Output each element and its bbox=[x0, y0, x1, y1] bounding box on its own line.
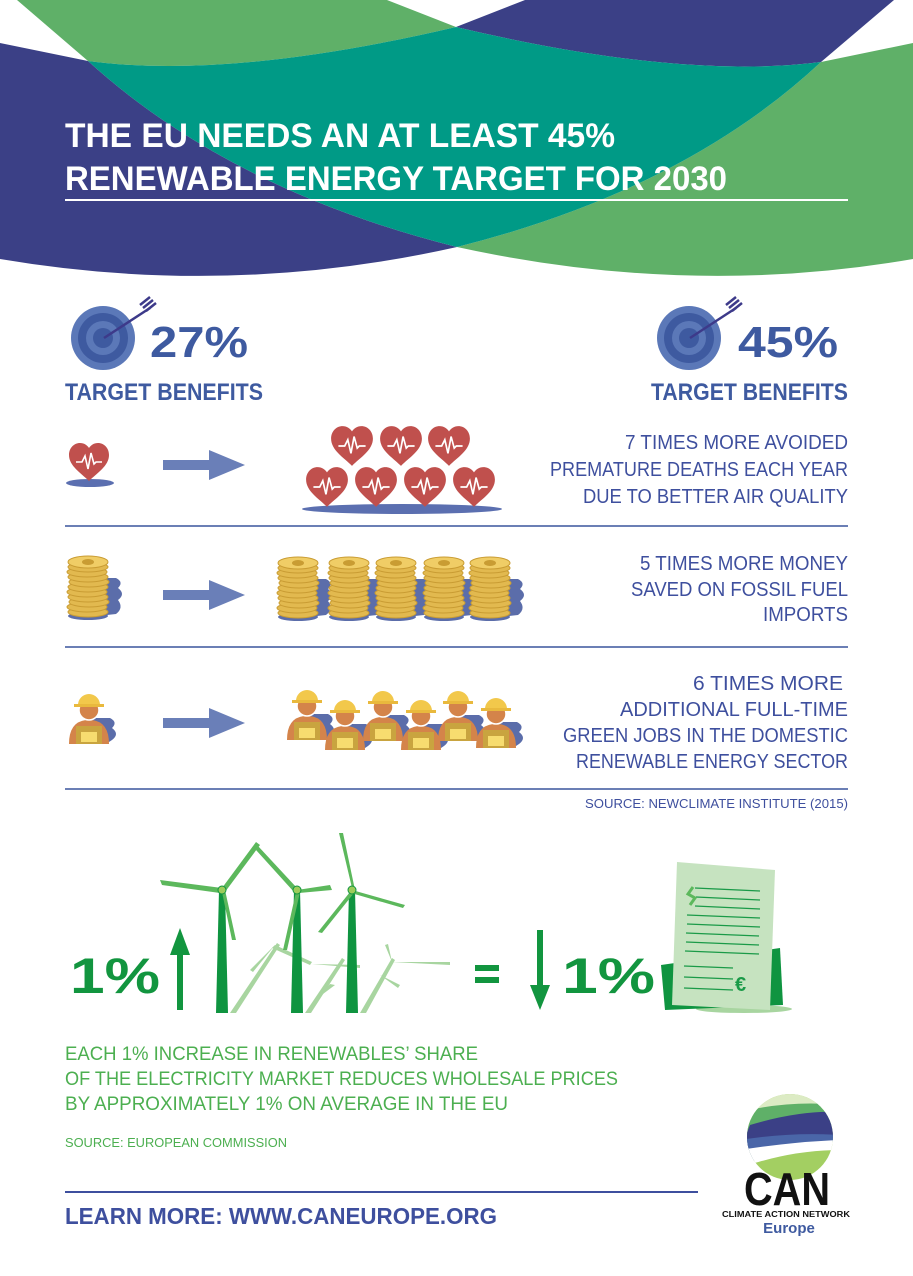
text: jobs: RENEWABLE ENERGY SECTOR bbox=[576, 751, 848, 773]
equation: renewables vs prices bbox=[70, 833, 792, 1013]
text: money bbox=[631, 553, 848, 626]
text: jobs: GREEN JOBS IN THE DOMESTIC bbox=[563, 725, 848, 747]
text: learn more: LEARN MORE: WWW.CANEUROPE.ORG bbox=[65, 1203, 497, 1229]
icon: single coin stack bbox=[67, 556, 122, 620]
text: deaths: 7 TIMES MORE AVOIDED bbox=[625, 432, 848, 454]
arrow down bbox=[530, 930, 550, 1010]
logo: CAN Europe: CLIMATE ACTION NETWORK bbox=[722, 1210, 850, 1219]
45% target block bbox=[651, 297, 848, 406]
text: description bbox=[65, 1044, 618, 1115]
text: 1% up: 1% bbox=[70, 948, 160, 1004]
source: european commission: SOURCE: EUROPEAN COMMISSION bbox=[65, 1135, 287, 1150]
title: THE EU NEEDS AN AT LEAST 45% bbox=[65, 117, 615, 155]
45% target block: TARGET BENEFITS bbox=[651, 379, 848, 406]
icon: target right bbox=[657, 297, 742, 370]
arrow bbox=[163, 708, 245, 738]
row: money bbox=[67, 553, 848, 626]
text: description: BY APPROXIMATELY 1% ON AVERAGE IN THE EU bbox=[65, 1094, 508, 1115]
27% target block: 27% bbox=[150, 318, 248, 367]
text: deaths bbox=[550, 432, 848, 508]
arrow bbox=[163, 580, 245, 610]
icon: seven hearts bbox=[302, 426, 502, 514]
icon: wind turbines bbox=[160, 833, 450, 1013]
text: money: IMPORTS bbox=[763, 604, 848, 626]
icon: electricity bill: € bbox=[735, 974, 746, 996]
row: health bbox=[66, 426, 848, 514]
text: 1% down: 1% bbox=[562, 948, 655, 1004]
27% target block bbox=[65, 297, 263, 406]
text: jobs: ADDITIONAL FULL-TIME bbox=[620, 699, 848, 721]
text: deaths: DUE TO BETTER AIR QUALITY bbox=[583, 486, 848, 508]
icon: six workers bbox=[287, 690, 523, 750]
text: money: SAVED ON FOSSIL FUEL bbox=[631, 579, 848, 601]
45% target block: 45% bbox=[738, 318, 838, 367]
title bbox=[65, 117, 848, 201]
icon: single heart bbox=[66, 443, 114, 487]
arrow up bbox=[170, 928, 190, 1010]
arrow bbox=[163, 450, 245, 480]
text: description: EACH 1% INCREASE IN RENEWABLES’ SHARE bbox=[65, 1044, 478, 1065]
row: jobs bbox=[69, 673, 848, 773]
icon: electricity bill bbox=[661, 862, 792, 1013]
27% target block: TARGET BENEFITS bbox=[65, 379, 263, 406]
source: newclimate: SOURCE: NEWCLIMATE INSTITUTE (2015) bbox=[585, 796, 848, 811]
logo: CAN Europe: Europe bbox=[763, 1220, 815, 1237]
text: equals bbox=[475, 965, 499, 983]
text: money: 5 TIMES MORE MONEY bbox=[640, 553, 848, 575]
text: jobs bbox=[563, 673, 848, 773]
logo: CAN Europe bbox=[722, 1090, 850, 1237]
logo: CAN Europe: CAN bbox=[744, 1163, 830, 1215]
icon: target left bbox=[71, 297, 156, 370]
text: jobs: 6 TIMES MORE bbox=[693, 673, 843, 695]
header banner bbox=[0, 0, 913, 276]
icon: five coin stacks bbox=[277, 557, 524, 621]
text: deaths: PREMATURE DEATHS EACH YEAR bbox=[550, 459, 848, 481]
text: description: OF THE ELECTRICITY MARKET REDUCES WHOLESALE PRICES bbox=[65, 1069, 618, 1090]
icon: single worker bbox=[69, 694, 116, 744]
title: RENEWABLE ENERGY TARGET FOR 2030 bbox=[65, 160, 727, 198]
